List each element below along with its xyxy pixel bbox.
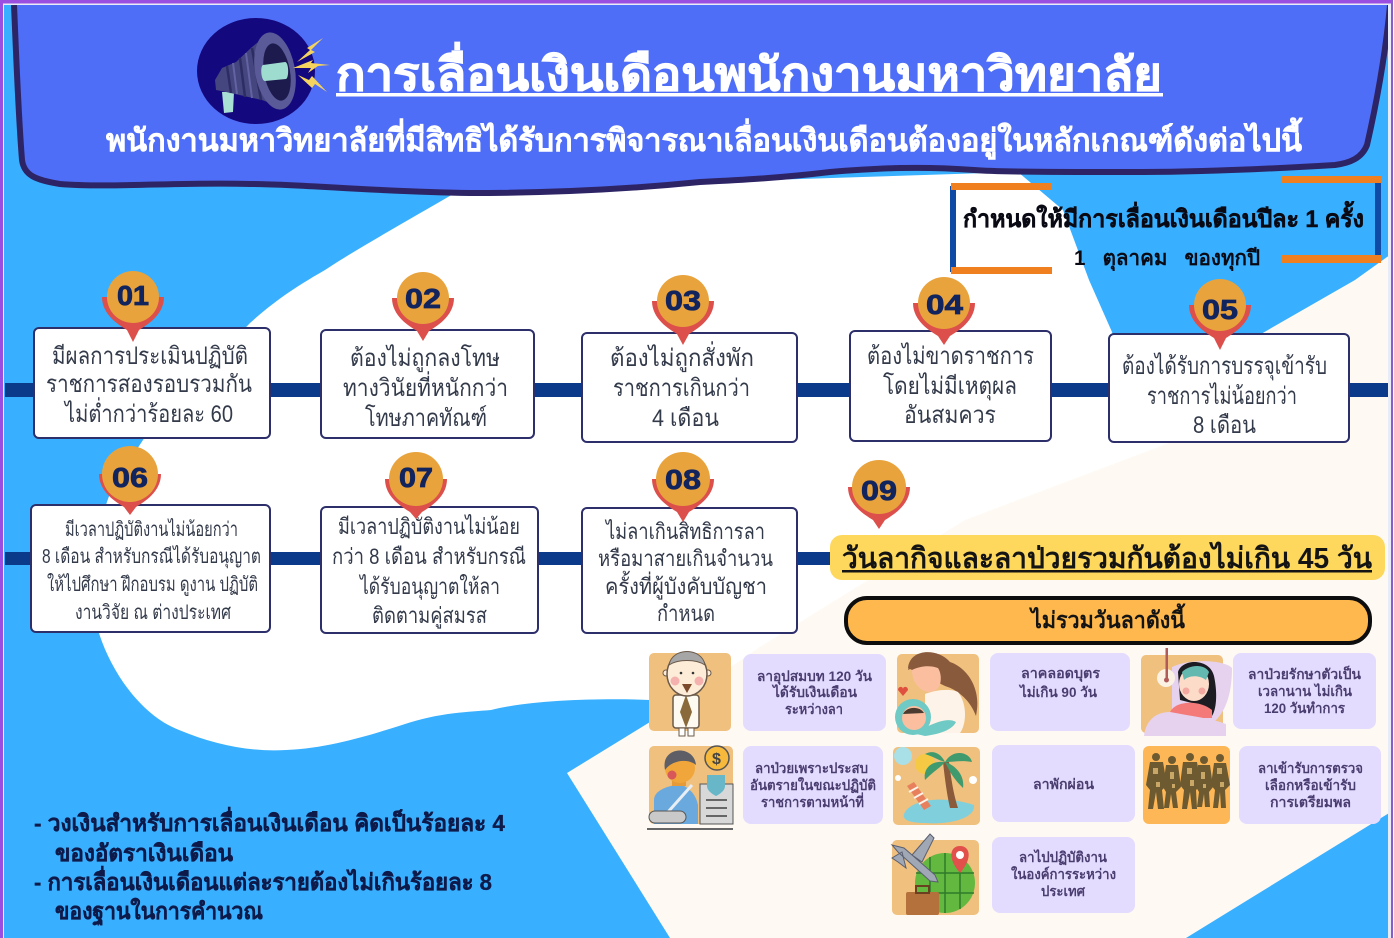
- label: vacation leave: ลาพักผ่อน: [1033, 776, 1094, 792]
- card 02: โทษภาคทัณฑ์: [365, 404, 487, 432]
- icon: injured worker: $: [712, 751, 721, 768]
- card 06: มีเวลาปฏิบัติงานไม่น้อยกว่า: [65, 518, 238, 541]
- label: maternity leave: [990, 653, 1130, 731]
- card 04: อันสมควร: [904, 402, 996, 429]
- icon: sick woman: [1141, 648, 1232, 736]
- icon: mother and baby: [895, 652, 979, 736]
- card 08: [582, 508, 797, 633]
- card 07: มีเวลาปฏิบัติงานไม่น้อย: [338, 514, 520, 539]
- card 05: 8 เดือน: [1193, 412, 1256, 439]
- button: excluded leave types: [846, 598, 1370, 643]
- highlight: 45 day leave limit: วันลากิจและลาป่วยรวมกันต้องไม่เกิน 45 วัน: [842, 541, 1372, 575]
- card 02: ทางวินัยที่หนักกว่า: [343, 371, 508, 402]
- label: ordination leave: ลาอุปสมบท 120 วัน: [757, 668, 872, 685]
- highlight: 45 day leave limit: [830, 535, 1385, 580]
- badge 05: [1189, 279, 1251, 350]
- card 08: ไม่ลาเกินสิทธิการลา: [604, 519, 765, 544]
- card 08: ครั้งที่ผู้บังคับบัญชา: [605, 571, 767, 600]
- badge 06: [99, 446, 161, 515]
- icon: monk: [649, 652, 731, 736]
- title: การเลื่อนเงินเดือนพนักงานมหาวิทยาลัย: [336, 42, 1162, 100]
- label: military leave: ลาเข้ารับการตรวจ: [1258, 760, 1363, 776]
- label: duty injury leave: อันตรายในขณะปฏิบัติ: [750, 776, 876, 794]
- card 06: งานวิจัย ณ ต่างประเทศ: [75, 602, 231, 624]
- label: ordination leave: [743, 654, 886, 731]
- label: duty injury leave: ราชการตามหน้าที่: [761, 792, 864, 810]
- label: international organisation leave: ลาไปปฏิบัติงาน: [1019, 848, 1107, 866]
- card 02: [321, 330, 534, 438]
- badge 08: [652, 452, 714, 522]
- label: duty injury leave: [743, 746, 883, 824]
- badge 01: [102, 271, 164, 342]
- card 04: ต้องไม่ขาดราชการ: [867, 342, 1034, 370]
- badge 01: 01: [117, 280, 149, 311]
- label: international organisation leave: ในองค์การระหว่าง: [1011, 865, 1116, 882]
- label: military leave: [1239, 746, 1381, 824]
- label: military leave: เลือกหรือเข้ารับ: [1265, 777, 1356, 793]
- callout: annual raise schedule: [951, 176, 1381, 274]
- label: duty injury leave: ลาป่วยเพราะประสบ: [755, 760, 868, 776]
- card 01: [34, 328, 270, 438]
- label: ordination leave: ได้รับเงินเดือน: [771, 683, 857, 700]
- notes: salary budget rules: ของฐานในการคำนวณ: [55, 897, 263, 926]
- card 04: โดยไม่มีเหตุผล: [883, 372, 1017, 401]
- badge 03: 03: [665, 285, 701, 316]
- icon: plane and globe: [892, 834, 979, 915]
- card 03: [582, 333, 797, 442]
- label: sick leave: เวลานาน ไม่เกิน: [1258, 682, 1352, 699]
- label: maternity leave: ไม่เกิน 90 วัน: [1018, 683, 1097, 700]
- card 05: ต้องได้รับการบรรจุเข้ารับ: [1122, 352, 1327, 381]
- button: excluded leave types: ไม่รวมวันลาดังนี้: [1028, 603, 1186, 633]
- card 01: ราชการสองรอบรวมกัน: [46, 371, 252, 398]
- icon: injured worker: [647, 746, 733, 829]
- badge 09: 09: [861, 475, 897, 506]
- label: vacation leave: [992, 745, 1135, 822]
- card 06: 8 เดือน สำหรับกรณีได้รับอนุญาต: [42, 545, 261, 569]
- card 05: ราชการไม่น้อยกว่า: [1147, 382, 1297, 410]
- badge 04: [913, 277, 975, 345]
- icon: soldiers: [1143, 746, 1230, 824]
- notes: salary budget rules: [34, 806, 505, 926]
- badge 04: 04: [926, 289, 963, 320]
- card 03: ต้องไม่ถูกสั่งพัก: [610, 341, 754, 373]
- label: sick leave: [1233, 653, 1376, 729]
- timeline connector: row 2: [5, 552, 835, 565]
- callout: annual raise schedule: 1 ตุลาคม ของทุกปี: [1074, 246, 1260, 272]
- label: ordination leave: ระหว่างลา: [785, 701, 843, 717]
- badge 05: 05: [1202, 294, 1238, 325]
- card 07: ติดตามคู่สมรส: [372, 603, 487, 629]
- card 01: ไม่ต่ำกว่าร้อยละ 60: [63, 397, 233, 428]
- label: international organisation leave: [992, 837, 1135, 913]
- label: military leave: การเตรียมพล: [1270, 794, 1351, 810]
- card 06: ให้ไปศึกษา ฝึกอบรม ดูงาน ปฏิบัติ: [47, 573, 258, 597]
- card 05: [1109, 334, 1349, 442]
- timeline connector: row 1: [5, 383, 1390, 397]
- badge 07: [385, 452, 447, 519]
- card 02: ต้องไม่ถูกลงโทษ: [350, 344, 500, 373]
- card 03: 4 เดือน: [652, 405, 719, 432]
- card 07: [321, 507, 538, 633]
- badge 02: 02: [405, 283, 441, 314]
- card 08: กำหนด: [657, 601, 715, 626]
- notes: salary budget rules: - วงเงินสำหรับการเลื่อนเงินเดือน คิดเป็นร้อยละ 4: [34, 806, 505, 836]
- subtitle: พนักงานมหาวิทยาลัยที่มีสิทธิได้รับการพิจารณาเลื่อนเงินเดือนต้องอยู่ในหลักเกณฑ์ดังต่อไปนี้: [106, 117, 1303, 160]
- label: sick leave: 120 วันทำการ: [1264, 700, 1345, 716]
- badge 06: 06: [112, 462, 148, 493]
- card 01: มีผลการประเมินปฏิบัติ: [52, 343, 248, 370]
- callout: annual raise schedule: กำหนดให้มีการเลื่อนเงินเดือนปีละ 1 ครั้ง: [963, 200, 1364, 233]
- card 07: ได้รับอนุญาตให้ลา: [358, 574, 500, 600]
- card 07: กว่า 8 เดือน สำหรับกรณี: [332, 544, 526, 569]
- notes: salary budget rules: ของอัตราเงินเดือน: [55, 840, 233, 866]
- label: maternity leave: ลาคลอดบุตร: [1021, 665, 1100, 682]
- badge 09: [848, 460, 910, 529]
- badge 03: [652, 275, 714, 345]
- label: sick leave: ลาป่วยรักษาตัวเป็น: [1248, 665, 1361, 682]
- label: international organisation leave: ประเทศ: [1041, 883, 1086, 899]
- card 06: [31, 505, 270, 632]
- card 08: หรือมาสายเกินจำนวน: [598, 546, 773, 571]
- card 04: [850, 331, 1051, 441]
- card 03: ราชการเกินกว่า: [613, 375, 750, 402]
- badge 02: [392, 272, 454, 341]
- header banner: [14, 5, 1390, 193]
- icon: megaphone: [197, 18, 330, 124]
- notes: salary budget rules: - การเลื่อนเงินเดือนแต่ละรายต้องไม่เกินร้อยละ 8: [34, 865, 492, 895]
- badge 07: 07: [399, 462, 433, 493]
- badge 08: 08: [665, 464, 701, 495]
- icon: beach holiday: [893, 747, 980, 825]
